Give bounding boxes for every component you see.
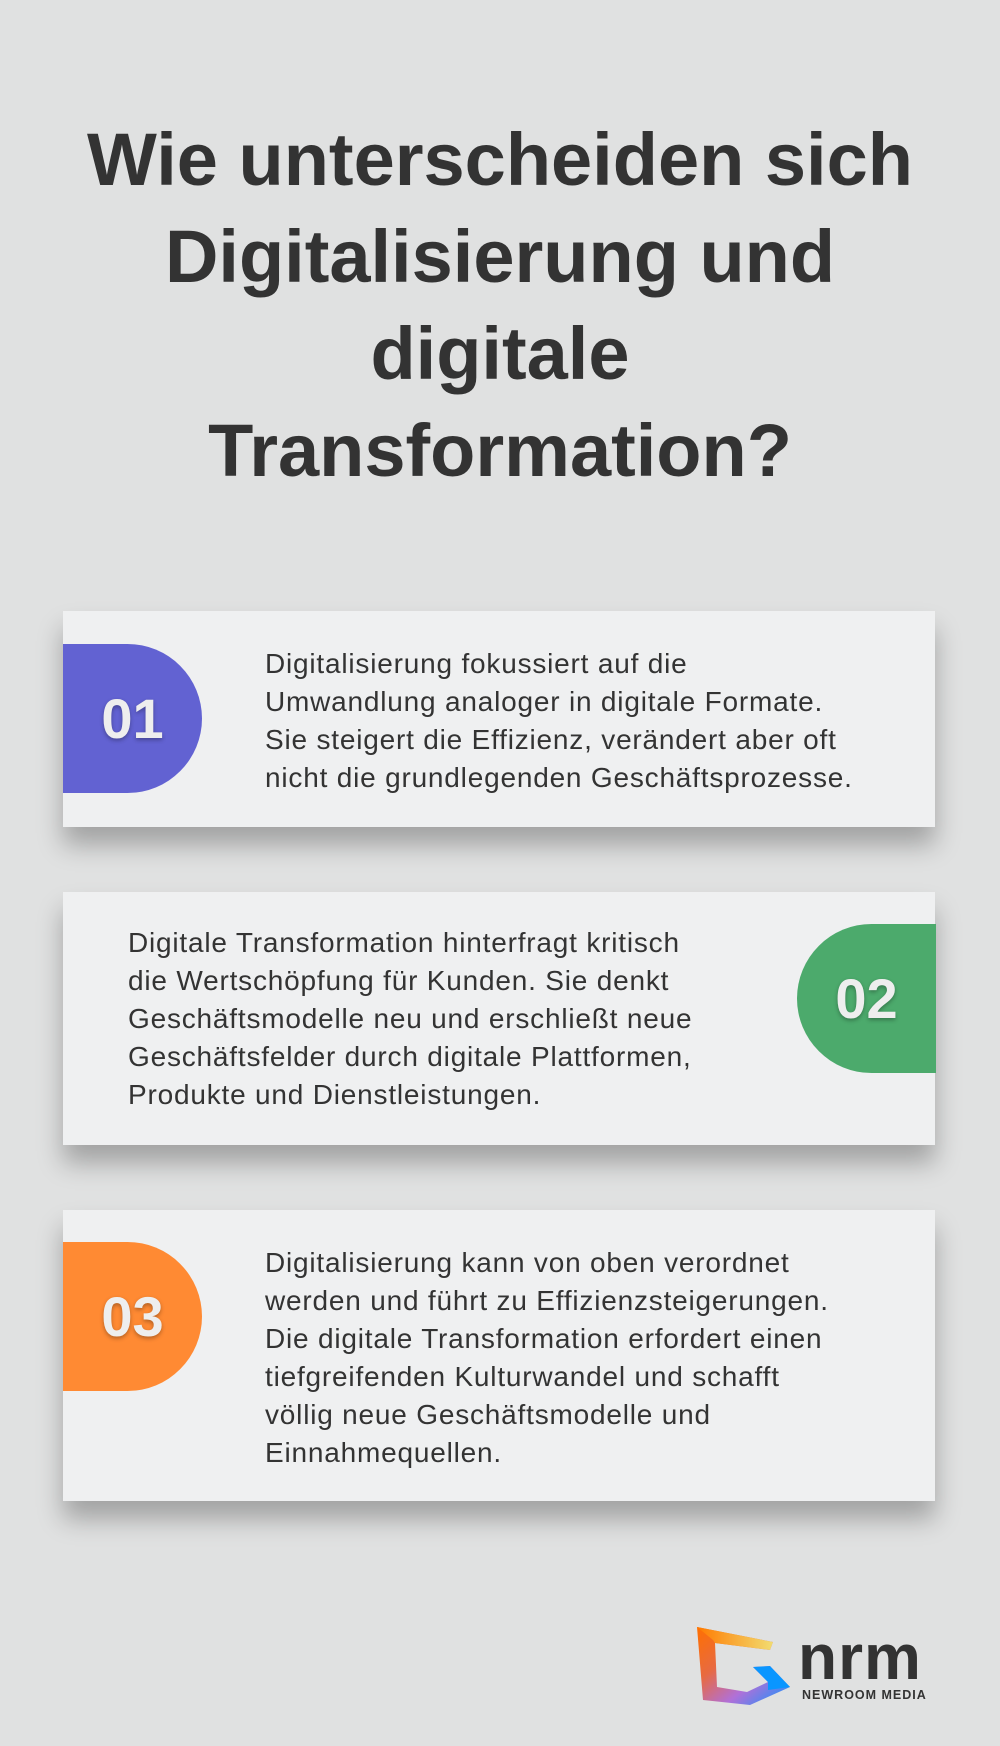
- text 2: die Wertschöpfung für Kunden. Sie denkt: [128, 965, 669, 996]
- text 3: [265, 1247, 829, 1468]
- text 1: nicht die grundlegenden Geschäftsprozesse.: [265, 762, 853, 793]
- text 3: tiefgreifenden Kulturwandel und schafft: [265, 1361, 780, 1392]
- text 1: [265, 648, 853, 793]
- title: [87, 118, 913, 492]
- badge 01: [63, 644, 202, 793]
- badge 03: [63, 1242, 202, 1391]
- text 2: Geschäftsfelder durch digitale Plattformen,: [128, 1041, 692, 1072]
- text 3: Digitalisierung kann von oben verordnet: [265, 1247, 790, 1278]
- text 2: Produkte und Dienstleistungen.: [128, 1079, 541, 1110]
- text 3: Einnahmequellen.: [265, 1437, 502, 1468]
- text 2: Geschäftsmodelle neu und erschließt neue: [128, 1003, 692, 1034]
- logo: [697, 1621, 927, 1705]
- badge 02: 02: [835, 967, 898, 1030]
- text 3: Die digitale Transformation erfordert einen: [265, 1323, 822, 1354]
- logo: NEWROOM MEDIA: [802, 1688, 927, 1702]
- text 3: werden und führt zu Effizienzsteigerungen.: [265, 1285, 829, 1316]
- badge 01: 01: [101, 687, 164, 750]
- badge 03: 03: [101, 1285, 164, 1348]
- text 3: völlig neue Geschäftsmodelle und: [265, 1399, 711, 1430]
- text 2: [128, 927, 692, 1110]
- panel: card 3: [63, 1210, 935, 1501]
- title: Digitalisierung und: [165, 215, 835, 298]
- panel: card 2: [63, 892, 935, 1145]
- icon: logo mark: [697, 1627, 790, 1705]
- panel: card 1: [63, 611, 935, 827]
- text 1: Umwandlung analoger in digitale Formate.: [265, 686, 823, 717]
- title: Wie unterscheiden sich: [87, 118, 913, 201]
- text 2: Digitale Transformation hinterfragt kritisch: [128, 927, 680, 958]
- badge 02: [797, 924, 936, 1073]
- title: digitale: [370, 312, 630, 395]
- text 1: Digitalisierung fokussiert auf die: [265, 648, 688, 679]
- logo text: nrm: [798, 1621, 922, 1693]
- text 1: Sie steigert die Effizienz, verändert aber oft: [265, 724, 837, 755]
- title: Transformation?: [208, 409, 792, 492]
